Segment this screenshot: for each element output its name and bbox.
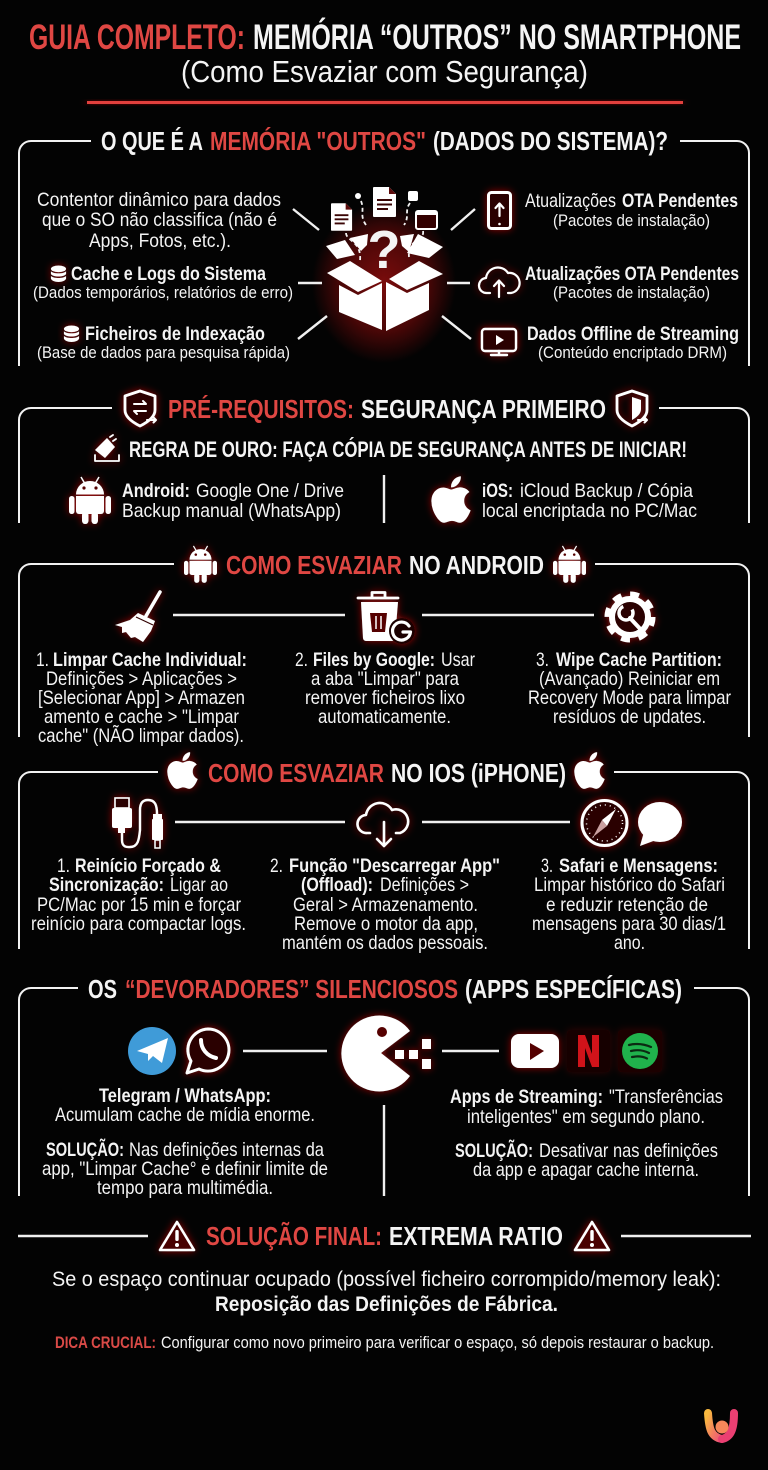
title: GUIA COMPLETO: [29,18,245,57]
icon: database index [64,326,79,342]
heading: devoradores: “DEVORADORES” SILENCIOSOS [125,974,458,1004]
text: factory reset: Reposição das Definições de Fábrica. [215,1293,558,1316]
step 1 android: 1. [36,649,49,671]
icon: database cache [51,266,66,282]
icon: pacman [341,1016,431,1092]
step 1 ios [31,855,246,935]
text: ota 2: (Pacotes de instalação) [553,284,710,302]
step 3 android: 3. [536,649,549,671]
icon: netflix [567,1030,610,1072]
text: apps de streaming: Apps de Streaming: [450,1086,603,1108]
step 2 ios [270,855,500,954]
icon: android left [184,546,217,583]
title divider [87,101,683,104]
text: android backup: Backup manual (WhatsApp) [122,500,341,522]
text: ficheiros de indexação: Ficheiros de Indexação [85,323,265,345]
heading: o que é: O QUE É A [101,126,203,156]
text: apps de streaming: Desativar nas definições [539,1140,718,1162]
step 2 android: Usar [441,649,475,671]
text: ios backup [482,480,697,522]
heading: devoradores: OS [88,974,117,1004]
text: dados offline: (Conteúdo encriptado DRM) [538,344,727,362]
icon: whatsapp [187,1029,229,1073]
icon: apple right [574,752,605,789]
heading: pré-requisitos [168,394,606,424]
text: ota 2 [525,263,739,302]
icon: android right [553,546,586,583]
text: telegram whatsapp: tempo para multimédia. [97,1177,273,1199]
text: apps de streaming: inteligentes" em segundo plano. [467,1106,705,1128]
step 2 ios: (Offload): [301,874,373,896]
tip text: Configurar como novo primeiro para verificar o espaço, só depois restaurar o backup. [161,1334,714,1352]
step 3 ios: 3. [541,855,553,877]
step 3 ios: e reduzir retenção de [546,894,708,916]
step 1 ios: PC/Mac por 15 min e forçar [37,894,241,916]
text: android backup: Google One / Drive [196,480,344,502]
text: apps de streaming [450,1086,723,1181]
icon: phone update [488,192,510,228]
icon: shield transfer right [617,391,647,426]
heading: android: NO ANDROID [409,550,544,580]
icon: android [69,477,111,524]
text: factory reset [52,1268,721,1316]
icon: warning right [575,1222,609,1250]
step 2 ios: 2. [270,855,283,877]
text: apps de streaming: "Transferências [609,1086,723,1108]
icon: telegram [128,1027,176,1075]
text: telegram whatsapp: Telegram / WhatsApp: [99,1085,271,1107]
icon: chat bubble [638,802,682,846]
text: telegram whatsapp: SOLUÇÃO: [46,1138,124,1161]
text: ota 1: OTA Pendentes [622,190,738,212]
text: cache e logs [33,263,293,302]
step 2 ios: Remove o motor da app, [294,913,478,935]
icon: shield transfer left [125,391,156,426]
icon: apple left [167,752,198,789]
definition text: Apps, Fotos, etc.). [89,230,231,252]
icon: monitor play [482,329,516,355]
definition text: Contentor dinâmico para dados [37,189,281,211]
text: ficheiros de indexação: (Base de dados para pesquisa rápida) [37,344,290,362]
connector left [243,1050,327,1052]
step 3 ios: ano. [614,932,645,954]
icon: safari compass [582,800,627,846]
text: ota 1: Atualizações [525,190,616,212]
heading: pré-requisitos: SEGURANÇA PRIMEIRO [361,394,606,424]
text: telegram whatsapp: Nas definições internas da [129,1139,324,1161]
icon: mystery box: ? [368,220,400,280]
step 1 ios: reinício para compactar logs. [31,913,246,935]
text: dados offline [527,323,739,362]
panel: como esvaziar no ios [19,752,749,954]
step 2 android: 2. [295,649,308,671]
step 2 ios: Geral > Armazenamento. [293,894,478,916]
heading: android: COMO ESVAZIAR [226,550,402,580]
step 1 ios: Ligar ao [170,874,228,896]
heading: o que é [101,126,668,156]
step 1 android: cache" (NÃO limpar dados). [38,723,244,747]
title [29,17,741,57]
heading: pré-requisitos: PRÉ-REQUISITOS: [168,394,354,424]
logo [708,1413,734,1439]
text: cache e logs: Cache e Logs do Sistema [71,263,266,285]
step 3 ios: Safari e Mensagens: [559,855,718,877]
heading: solução final [206,1221,563,1251]
step 3 android [528,649,731,728]
step 3 ios: mensagens para 30 dias/1 [532,913,726,935]
icon: spotify [618,1030,662,1072]
icon: cloud download [357,803,408,846]
step 3 ios [532,855,726,954]
icon: eraser backup [95,435,119,461]
step 3 android: (Avançado) Reiniciar em [539,668,720,690]
step 2 android: remover ficheiros lixo [305,687,465,709]
icon: apple [431,476,471,523]
heading: solução final: EXTREMA RATIO [389,1221,563,1251]
definition text [37,189,281,252]
heading: ios: NO IOS (iPHONE) [391,758,566,788]
step 2 ios: Função "Descarregar App" [289,855,500,877]
icon: cloud upload [479,267,520,297]
heading: o que é: MEMÓRIA "OUTROS" [210,126,426,156]
heading: ios: COMO ESVAZIAR [208,758,384,788]
connectors [293,209,475,339]
text: apps de streaming: SOLUÇÃO: [455,1139,533,1162]
icon: gear wrench [607,594,653,640]
step 1 android: [Selecionar App] > Armazen [38,687,245,709]
step 1 android: amento e cache > "Limpar [44,706,239,728]
step 3 android: Wipe Cache Partition: [556,649,722,671]
tip text: DICA CRUCIAL: [55,1334,156,1352]
text: android backup [122,480,344,522]
text: factory reset: Se o espaço continuar ocupado (possível ficheiro corrompido/memory leak): [52,1268,721,1291]
step 2 android: a aba "Limpar" para [311,668,459,690]
subtitle: (Como Esvaziar com Segurança) [181,54,588,89]
panel: solução final [18,1221,751,1352]
text: telegram whatsapp [42,1085,328,1199]
text: android backup: Android: [122,480,190,502]
connectors [175,821,570,823]
text: ios backup: local encriptada no PC/Mac [482,500,697,522]
icon: trash with google [358,592,415,644]
panel: pré-requisitos [19,391,749,524]
step 2 android [295,649,475,728]
step 1 ios: 1. [57,855,70,877]
text: apps de streaming: da app e apagar cache interna. [473,1159,699,1181]
heading: o que é: (DADOS DO SISTEMA)? [433,126,668,156]
step 1 android: Limpar Cache Individual: [53,649,247,671]
step 3 android: Recovery Mode para limpar [528,687,731,709]
step 1 ios: Sincronização: [49,874,164,896]
definition text: que o SO não classifica (não é [42,209,277,231]
icon: warning left [160,1222,194,1250]
icon: mystery box [312,187,456,363]
heading: ios [208,758,566,788]
text: ios backup: iOS: [482,480,513,502]
heading: solução final: SOLUÇÃO FINAL: [206,1221,382,1251]
step 2 ios: Definições > [380,874,469,896]
text: ota 1 [525,190,738,230]
text: telegram whatsapp: Acumulam cache de mídia enorme. [55,1104,315,1126]
icon: broom [115,592,160,642]
step 2 android: Files by Google: [313,649,435,671]
text: cache e logs: (Dados temporários, relatórios de erro) [33,284,293,302]
heading: devoradores: (APPS ESPECÍFICAS) [465,974,682,1004]
step 1 android [36,649,247,747]
step 2 ios: mantém os dados pessoais. [282,932,488,954]
text: ficheiros de indexação [37,323,290,362]
connector right [442,1050,499,1052]
connectors [173,614,594,616]
text: telegram whatsapp: app, "Limpar Cache° e definir limite de [42,1158,328,1180]
panel: como esvaziar no android [19,546,749,747]
divider [383,1105,385,1196]
step 2 android: automaticamente. [318,706,451,728]
panel: devoradores silenciosos [19,974,749,1199]
step 3 ios: Limpar histórico do Safari [534,874,725,896]
text: ota 1: (Pacotes de instalação) [553,212,710,230]
step 1 android: Definições > Aplicações > [46,668,237,690]
icon: youtube [511,1034,559,1068]
step 1 ios: Reinício Forçado & [75,855,221,877]
step 3 android: resíduos de updates. [553,706,706,728]
heading: devoradores [88,974,682,1004]
icon: usb cable [112,798,163,848]
heading: android [226,550,544,580]
panel: o que é a memória outros [19,126,749,366]
text: ios backup: iCloud Backup / Cópia [520,480,693,502]
divider [383,475,385,523]
